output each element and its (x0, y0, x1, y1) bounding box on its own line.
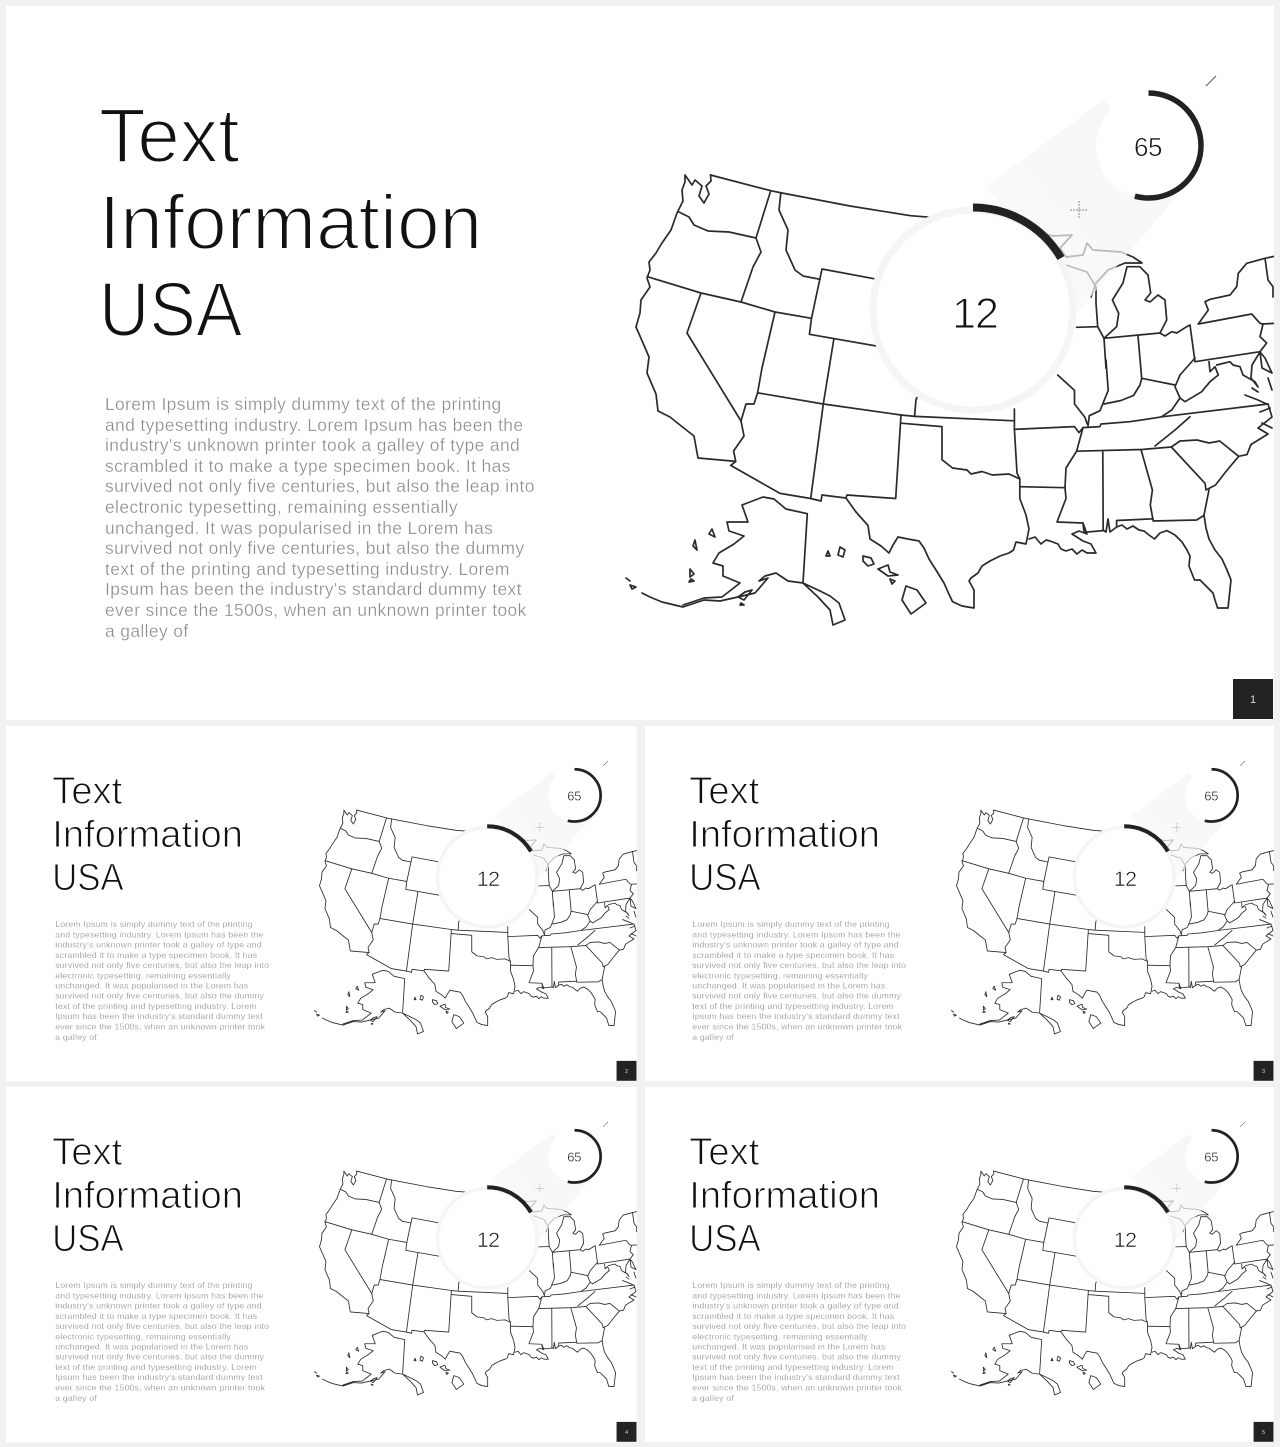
panel: slide 5 (643, 1087, 1274, 1442)
text block: description: and typesetting industry. Lorem Ipsum has been the (105, 415, 523, 435)
panel: slide 4 (6, 1087, 637, 1442)
title (52, 1131, 243, 1260)
text block: description: scrambled it to make a type specimen book. It has (105, 456, 511, 476)
text block: description: electronic typesetting, remaining essentially (692, 1331, 868, 1341)
value: 65: 65 (1134, 132, 1162, 162)
page number (617, 1061, 636, 1081)
text block: description: unchanged. It was popularised in the Lorem has (55, 1342, 248, 1352)
text block: description: scrambled it to make a type specimen book. It has (55, 1311, 257, 1321)
title: USA (52, 856, 124, 899)
map of USA with callouts (951, 760, 1274, 1034)
text block: description: ever since the 1500s, when an unknown printer took (55, 1383, 265, 1392)
text block: description: electronic typesetting, remaining essentially (105, 497, 458, 517)
panel: main slide (6, 6, 1274, 720)
text block: description: unchanged. It was popularised in the Lorem has (55, 981, 248, 991)
page number: 1 (1250, 694, 1256, 706)
text block: description: survived not only five centuries, but also the dummy (55, 1352, 264, 1362)
text block: description: industry's unknown printer took a galley of type and (55, 940, 262, 950)
title: USA (689, 1217, 761, 1260)
text block: description: Lorem Ipsum is simply dummy text of the printing (55, 919, 253, 929)
map of USA with callouts (314, 760, 637, 1034)
title: Information (52, 813, 243, 855)
text block: description: survived not only five centuries, but also the leap into (692, 1321, 906, 1331)
page number: 4 (625, 1429, 628, 1435)
title: Text (52, 1131, 122, 1173)
text block: description: Ipsum has been the industry's standard dummy text (55, 1372, 263, 1382)
text block: description: a galley of (55, 1032, 97, 1042)
text block: description: ever since the 1500s, when an unknown printer took (55, 1022, 265, 1031)
title: Information (52, 1174, 243, 1216)
text block: description: unchanged. It was popularised in the Lorem has (105, 518, 493, 538)
text block: description: survived not only five centuries, but also the dummy (105, 538, 524, 558)
text block: description: survived not only five centuries, but also the dummy (692, 1352, 901, 1362)
text block: description: a galley of (692, 1393, 734, 1403)
text block: description: industry's unknown printer took a galley of type and (692, 940, 899, 950)
text block: description: text of the printing and typesetting industry. Lorem (55, 1362, 257, 1372)
page number: 5 (1262, 1429, 1265, 1435)
text block: description (692, 921, 906, 1042)
value: 12: 12 (1114, 1228, 1137, 1252)
text block: description: Ipsum has been the industry's standard dummy text (692, 1011, 900, 1021)
text block: description (692, 1282, 906, 1402)
text block: description: Ipsum has been the industry's standard dummy text (105, 579, 522, 599)
title: Text (689, 770, 759, 812)
text block: description: survived not only five centuries, but also the leap into (55, 1321, 269, 1331)
page number (1254, 1061, 1273, 1081)
value: 65: 65 (567, 1150, 581, 1165)
panel: slide 3 (643, 726, 1274, 1081)
text block: description: survived not only five centuries, but also the leap into (55, 960, 269, 970)
value: 12: 12 (477, 867, 500, 891)
map of USA with callouts (314, 1122, 637, 1396)
page number (1254, 1422, 1273, 1442)
text block: description: unchanged. It was popularised in the Lorem has (692, 981, 885, 991)
panel: slide 2 (6, 726, 637, 1081)
title: Text (689, 1131, 759, 1173)
text block: description: Ipsum has been the industry's standard dummy text (692, 1372, 900, 1382)
text block: description: unchanged. It was popularised in the Lorem has (692, 1342, 885, 1352)
text block: description: and typesetting industry. Lorem Ipsum has been the (55, 929, 263, 939)
text block: description: and typesetting industry. Lorem Ipsum has been the (55, 1290, 263, 1300)
text block: description: a galley of (105, 621, 189, 641)
title: Text (99, 94, 239, 179)
text block: description: Lorem Ipsum is simply dummy text of the printing (55, 1280, 253, 1290)
text block: description: a galley of (692, 1032, 734, 1042)
value: 12: 12 (952, 290, 998, 338)
title: Text (52, 770, 122, 812)
text block: description: Lorem Ipsum is simply dummy text of the printing (692, 919, 890, 929)
text block: description: text of the printing and typesetting industry. Lorem (692, 1362, 894, 1372)
page number (617, 1422, 636, 1442)
page number: 3 (1262, 1068, 1265, 1074)
text block: description: survived not only five centuries, but also the dummy (692, 991, 901, 1001)
value: 65: 65 (1204, 1150, 1218, 1165)
title (52, 770, 243, 899)
page number: 2 (625, 1068, 628, 1074)
value: 65: 65 (567, 789, 581, 804)
title (690, 1138, 877, 1251)
text block: description: Ipsum has been the industry's standard dummy text (55, 1011, 263, 1021)
value: 12: 12 (477, 1228, 500, 1252)
text block: description: ever since the 1500s, when an unknown printer took (692, 1022, 902, 1031)
text block: description: electronic typesetting, remaining essentially (55, 1331, 231, 1341)
text block: description: text of the printing and typesetting industry. Lorem (692, 1001, 894, 1011)
title: Information (99, 181, 482, 266)
text block: description: electronic typesetting, remaining essentially (692, 970, 868, 980)
text block: description: scrambled it to make a type specimen book. It has (55, 950, 257, 960)
text block: description: text of the printing and typesetting industry. Lorem (55, 1001, 257, 1011)
text block: description: ever since the 1500s, when an unknown printer took (105, 600, 527, 620)
text block: description: survived not only five centuries, but also the dummy (55, 991, 264, 1001)
value: 12: 12 (1114, 867, 1137, 891)
title: Information (689, 1174, 880, 1216)
title: USA (52, 1217, 124, 1260)
value: 65: 65 (1204, 789, 1218, 804)
text block: description: survived not only five centuries, but also the leap into (692, 960, 906, 970)
page number (1233, 679, 1273, 719)
text block: description: electronic typesetting, remaining essentially (55, 970, 231, 980)
text block: description: industry's unknown printer took a galley of type and (692, 1301, 899, 1311)
text block: description (105, 394, 535, 641)
text block: description: a galley of (55, 1393, 97, 1403)
title (99, 94, 482, 353)
map of USA with callouts (625, 76, 1274, 626)
text block: description: industry's unknown printer took a galley of type and (55, 1301, 262, 1311)
title: USA (689, 856, 761, 899)
title (690, 778, 877, 890)
title: USA (99, 268, 242, 353)
text block: description (55, 1280, 269, 1403)
text block: description: text of the printing and typesetting industry. Lorem (105, 559, 510, 579)
text block: description: and typesetting industry. Lorem Ipsum has been the (692, 929, 900, 939)
text block: description: ever since the 1500s, when an unknown printer took (692, 1383, 902, 1392)
text block: description: and typesetting industry. Lorem Ipsum has been the (692, 1290, 900, 1300)
map of USA with callouts (951, 1122, 1274, 1396)
text block: description: Lorem Ipsum is simply dummy text of the printing (105, 394, 502, 414)
text block: description: Lorem Ipsum is simply dummy text of the printing (692, 1280, 890, 1290)
title: Information (689, 813, 880, 855)
text block: description: scrambled it to make a type specimen book. It has (692, 950, 894, 960)
text block: description: survived not only five centuries, but also the leap into (105, 476, 535, 496)
text block: description: scrambled it to make a type specimen book. It has (692, 1311, 894, 1321)
text block: description (55, 919, 269, 1042)
text block: description: industry's unknown printer took a galley of type and (105, 435, 520, 455)
